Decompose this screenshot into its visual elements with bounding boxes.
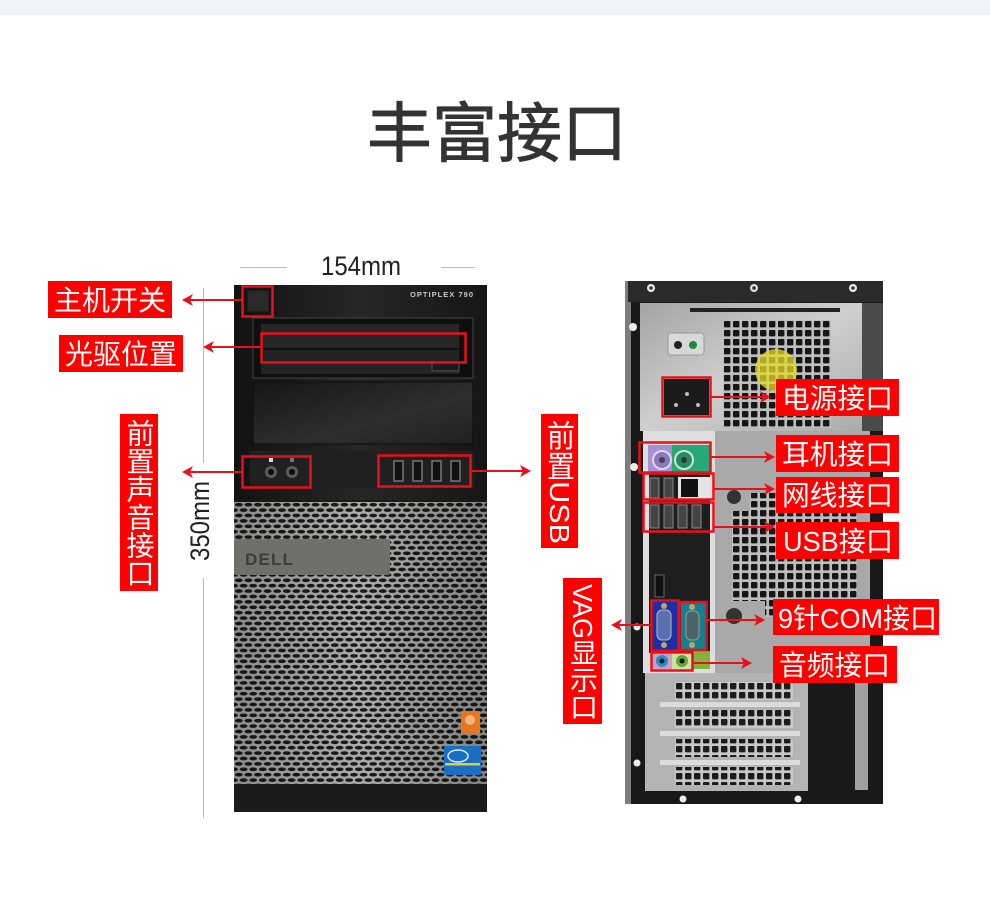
power supply plate: [640, 303, 862, 431]
expansion slots: [645, 673, 808, 791]
height dimension: 350mm: 350mm: [185, 481, 215, 561]
yellow fan sticker: [755, 349, 797, 391]
front upper black panel: [234, 285, 487, 500]
lower drive bay: [253, 382, 473, 444]
com port: [681, 603, 706, 649]
chassis lower plate: [715, 431, 870, 673]
mesh grille: [234, 502, 487, 784]
front usb ports: [394, 461, 460, 481]
front audio jacks: [265, 458, 298, 478]
rear usb ports: [650, 478, 701, 528]
power socket: [664, 379, 709, 415]
callout: audio: [652, 646, 897, 683]
width dimension: 154mm: 154mm: [321, 251, 401, 281]
callout: front audio: 前置声音接口: [124, 419, 154, 587]
psu indicator sockets: [668, 333, 704, 355]
front bottom edge: [234, 784, 487, 812]
rear audio jacks: [652, 651, 710, 669]
left silver edge: [625, 281, 631, 804]
bottom screws: [634, 760, 802, 802]
callout: usb: [644, 502, 899, 559]
callout: lan: [644, 474, 899, 513]
callout: front usb: 前置USB: [544, 420, 575, 544]
callout: power socket: 电源接口: [782, 383, 893, 414]
back view of computer tower: [625, 281, 883, 804]
right side strip: [862, 303, 883, 431]
callout: optical drive: [59, 334, 466, 372]
vga port: [652, 601, 677, 649]
lower vent: [732, 493, 857, 617]
callout: headphone: 耳机接口: [782, 439, 893, 470]
psu slit: [690, 308, 840, 312]
front view of computer tower: [234, 285, 487, 812]
displayport: [655, 575, 664, 597]
callout: usb: USB接口: [783, 526, 893, 557]
top strip: [0, 0, 990, 15]
ps2 ports: [653, 451, 693, 469]
front io strip: [250, 451, 474, 488]
callout: audio: 音频接口: [779, 650, 890, 681]
plate screws: [726, 490, 742, 624]
dell plate: DELL: [245, 550, 293, 569]
psu vent: [723, 320, 831, 428]
io shield: [643, 431, 715, 673]
title: 丰富接口: [367, 97, 627, 170]
intel badge: [444, 746, 481, 775]
callout: lan: 网线接口: [782, 480, 893, 511]
left screws: [629, 323, 640, 630]
power button: [247, 290, 269, 312]
callout: vga: [563, 578, 678, 724]
right vertical slot strip: [855, 683, 868, 790]
callout: com: 9针COM接口: [778, 603, 937, 634]
callout: front usb: [378, 414, 578, 548]
callout: com: [680, 599, 939, 650]
callout: headphone: [640, 435, 899, 472]
callout: front audio: [120, 414, 310, 591]
lan port: [678, 477, 710, 500]
callout: optical drive: 光驱位置: [65, 339, 177, 370]
top bar: [628, 281, 883, 302]
callout: power socket: [662, 378, 899, 416]
orange badge: [461, 711, 480, 734]
dell plate: [234, 539, 390, 575]
callout: power switch: 主机开关: [54, 285, 166, 316]
model name: OPTIPLEX 790: [410, 290, 473, 299]
callout: vga: VAG显示口: [567, 584, 598, 720]
callout: power switch: [48, 281, 272, 318]
optical drive bezel: [253, 318, 473, 378]
